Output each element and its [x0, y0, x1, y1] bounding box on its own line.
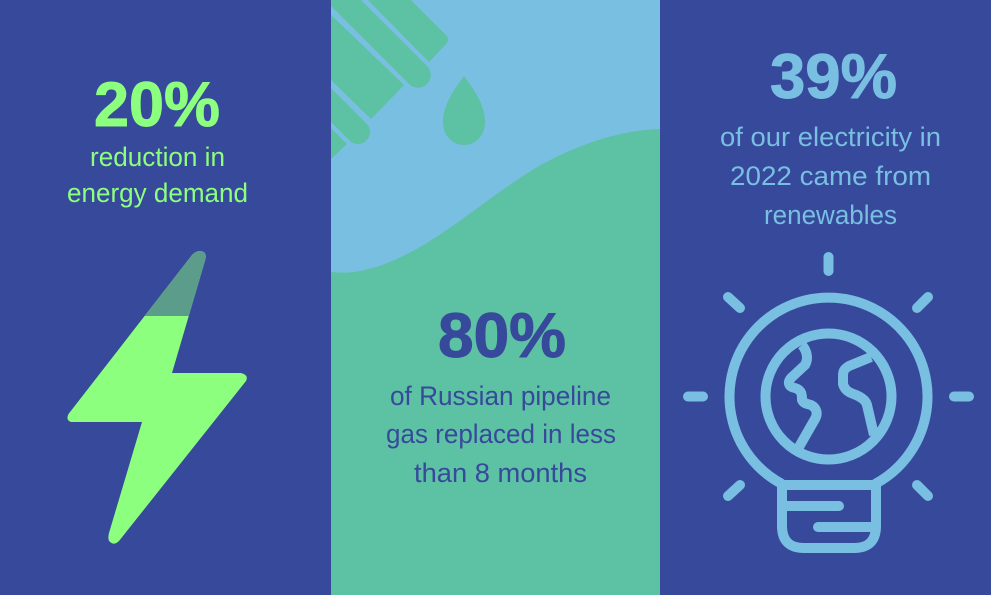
- text: reduction in energy demand: reduction in: [90, 142, 225, 172]
- stat: 20%: 20%: [94, 70, 220, 140]
- text: reduction in energy demand: [67, 142, 248, 208]
- text: of Russian pipeline gas replaced: [386, 381, 616, 488]
- text: reduction in energy demand: energy demand: [67, 178, 248, 208]
- text: of our electricity from renewables: of our electricity in: [720, 122, 941, 152]
- stat: 39%: 39%: [770, 42, 897, 112]
- text: of our electricity from renewables: renewables: [764, 200, 897, 230]
- wave: green ground: [331, 129, 660, 595]
- text: of Russian pipeline gas replaced: of Russian pipeline: [390, 381, 611, 411]
- icon: pipeline: [320, 0, 448, 159]
- panel: Russian pipeline gas: [320, 0, 660, 595]
- text: of Russian pipeline gas replaced: gas replaced in less: [386, 419, 616, 449]
- stat: 80%: 80%: [438, 301, 566, 371]
- text: of our electricity from renewables: [720, 122, 941, 230]
- panel: renewables: [660, 0, 991, 595]
- icon: gas drop: [443, 76, 485, 145]
- panel: energy demand: [67, 81, 247, 544]
- icon: lightning bolt: [67, 251, 247, 544]
- text: of Russian pipeline gas replaced: than 8 months: [414, 458, 587, 488]
- text: of our electricity from renewables: 2022 came from: [730, 161, 931, 191]
- icon: light bulb with globe: [688, 257, 969, 548]
